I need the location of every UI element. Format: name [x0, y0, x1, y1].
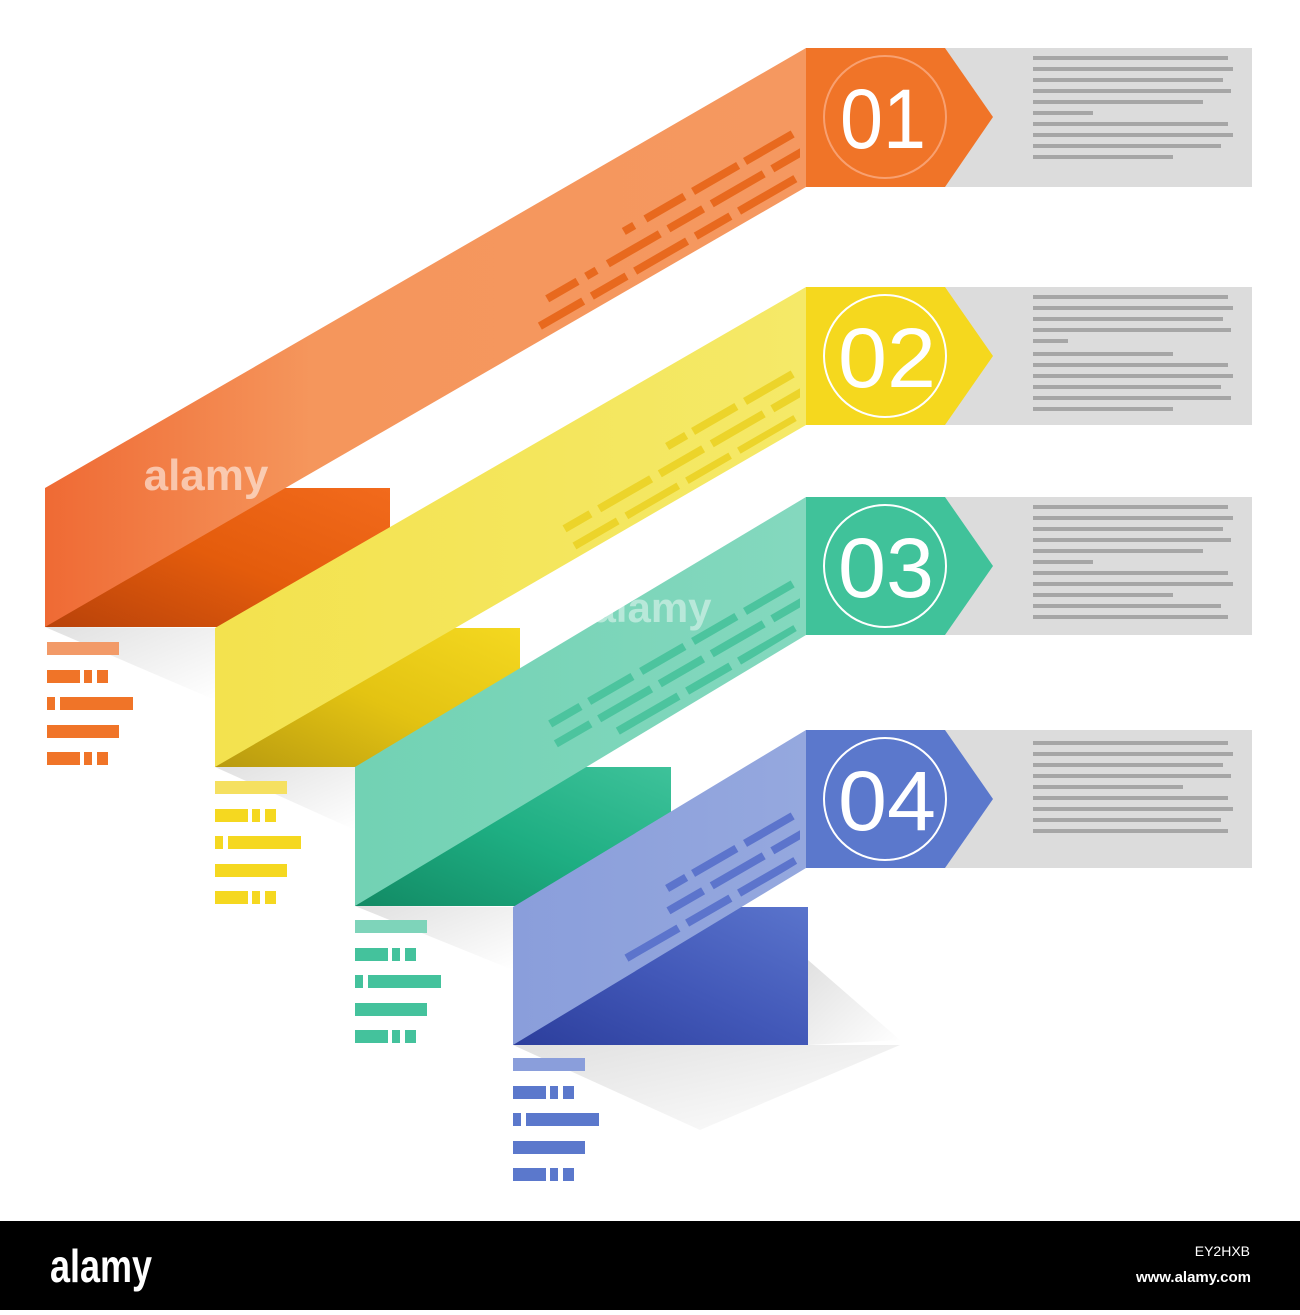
ribbon 4: blue [513, 730, 815, 1045]
footer bar: EY2HXB [1195, 1243, 1250, 1259]
footer bar: alamy [50, 1240, 152, 1292]
number tab 03: 03 [838, 521, 934, 615]
legend bars green [355, 920, 441, 1043]
number tab 01: 01 [840, 72, 926, 166]
number tab 04 [806, 730, 993, 868]
footer bar: www.alamy.com [1135, 1269, 1251, 1286]
shadows [45, 627, 900, 1130]
ribbon 3: green [355, 497, 815, 906]
number tab 04: 04 [838, 754, 936, 848]
ribbon 1: orange [45, 48, 815, 627]
number tab 02 [806, 287, 993, 425]
number tab 02: 02 [838, 311, 936, 405]
footer bar [0, 1221, 1300, 1310]
ribbon 2: yellow [215, 287, 815, 767]
legend bars orange [47, 642, 133, 765]
gray text panels [945, 48, 1252, 868]
number tab 01 [806, 48, 993, 187]
legend bars blue [513, 1058, 599, 1181]
ribbon 3: green: alamy [592, 584, 712, 631]
ribbon 1: orange: alamy [144, 451, 269, 500]
legend bars yellow [215, 781, 301, 904]
number tab 03 [806, 497, 993, 635]
